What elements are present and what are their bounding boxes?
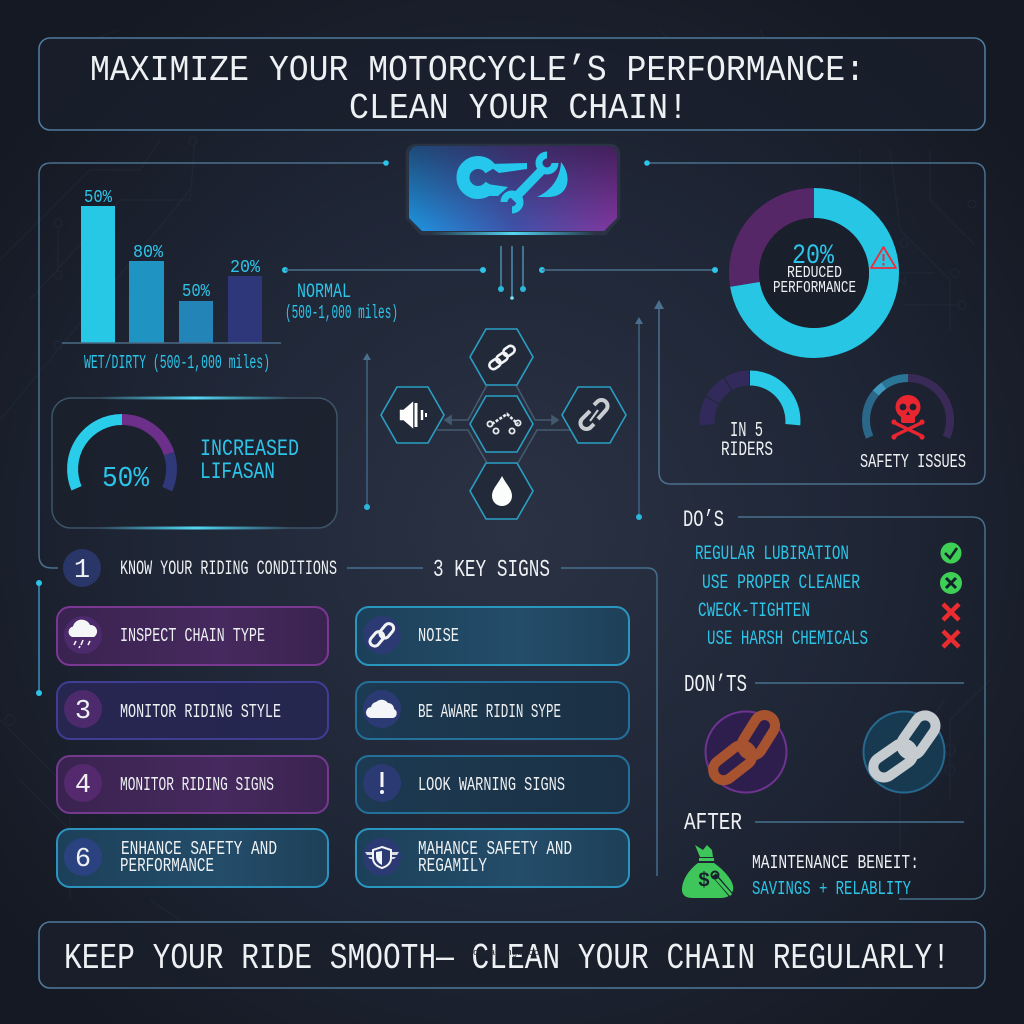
icon: clean chain bbox=[864, 711, 944, 792]
normal range label: (500-1,000 miles) bbox=[285, 302, 398, 324]
title text line 1: MAXIMIZE YOUR MOTORCYCLE’S PERFORMANCE: bbox=[90, 50, 865, 91]
donut label: PERFORMANCE bbox=[773, 279, 856, 298]
list: do's items: REGULAR LUBIRATION bbox=[695, 543, 849, 566]
icon: winged shield bbox=[365, 847, 399, 868]
icon: money bag: $ bbox=[698, 870, 710, 893]
icon: red cross 1 bbox=[943, 604, 959, 620]
icon: cloud bbox=[366, 700, 397, 718]
card: monitor riding style: MONITOR RIDING STYLE bbox=[120, 701, 281, 723]
icon: broken chain center bbox=[487, 414, 521, 434]
donut label bbox=[773, 264, 856, 298]
arrow: left vertical bbox=[363, 353, 371, 510]
lifespan card bbox=[52, 396, 337, 530]
icon: chain link top bbox=[488, 344, 516, 371]
card: inspect chain type bbox=[57, 607, 328, 665]
stat: in 5 riders: IN 5 bbox=[730, 420, 763, 443]
step 1 row: KNOW YOUR RIDING CONDITIONS bbox=[120, 558, 337, 581]
card: warning signs: LOOK WARNING SIGNS bbox=[418, 774, 565, 796]
logo panel bbox=[407, 145, 619, 235]
lifespan label: INCREASED bbox=[200, 436, 299, 462]
card: monitor riding signs: MONITOR RIDING SIGNS bbox=[120, 774, 274, 796]
card: warning signs bbox=[356, 756, 629, 813]
card: mahance safety: MAHANCE SAFETY AND bbox=[418, 838, 572, 860]
title text line 2: CLEAN YOUR CHAIN! bbox=[349, 88, 688, 129]
icon: warning triangle bbox=[871, 247, 896, 268]
panel: do's and don'ts bbox=[682, 507, 985, 900]
bar chart: 50% bbox=[84, 188, 112, 208]
stat: safety issues: SAFETY ISSUES bbox=[860, 451, 966, 473]
step 1 row: 1 bbox=[74, 556, 90, 586]
arrow: right vertical bbox=[635, 317, 643, 520]
benefit text bbox=[752, 852, 919, 900]
icon: exclamation bbox=[380, 772, 384, 794]
bar chart: 20% bbox=[230, 258, 260, 278]
list: do's items bbox=[695, 543, 868, 651]
donut chart bbox=[744, 203, 896, 343]
lifespan label bbox=[200, 436, 299, 485]
footer panel bbox=[39, 922, 985, 988]
benefit text: MAINTENANCE BENEIT: bbox=[752, 852, 919, 874]
card: mahance safety bbox=[356, 829, 629, 887]
card: enhance safety and performance: PERFORMANCE bbox=[120, 855, 214, 877]
frame: right connector bbox=[644, 160, 985, 484]
footer small overlaid text: cleaningbroom bbox=[473, 948, 545, 958]
donut label: REDUCED bbox=[787, 264, 842, 283]
stat: safety issues bbox=[860, 378, 966, 473]
normal range label bbox=[282, 267, 486, 324]
frame: left connector bbox=[36, 160, 389, 696]
icon: broken link right bbox=[580, 400, 608, 429]
list: do's items: USE PROPER CLEANER bbox=[702, 572, 860, 595]
card: enhance safety and performance: 6 bbox=[75, 845, 91, 875]
icon: chain link bbox=[368, 622, 396, 648]
card: monitor riding style: 3 bbox=[75, 697, 91, 727]
bar chart: 50% bbox=[182, 282, 210, 302]
hexagon connectors bbox=[437, 385, 570, 463]
connector lines under logo bbox=[498, 246, 526, 300]
benefit text: SAVINGS + RELABLITY bbox=[752, 878, 911, 900]
card: monitor riding signs bbox=[57, 756, 328, 813]
heading: 3 key signs: 3 KEY SIGNS bbox=[433, 557, 550, 584]
normal range label: NORMAL bbox=[297, 281, 351, 304]
icon: red cross 2 bbox=[943, 631, 959, 647]
donut value: 20% bbox=[792, 241, 834, 272]
card: enhance safety and performance bbox=[57, 829, 328, 887]
icon: rusty chain bbox=[706, 711, 786, 792]
heading: 3 key signs bbox=[347, 557, 657, 876]
card: noise: NOISE bbox=[418, 625, 459, 647]
icon: oil drop bbox=[492, 476, 512, 506]
card: be aware: BE AWARE RIDIN SYPE bbox=[418, 701, 561, 723]
bar chart: 80% bbox=[133, 243, 163, 263]
list: do's items: CWECK-TIGHTEN bbox=[698, 600, 810, 623]
stat: in 5 riders: RIDERS bbox=[721, 439, 773, 462]
card: inspect chain type: INSPECT CHAIN TYPE bbox=[120, 625, 265, 647]
icon: money bag bbox=[682, 845, 733, 898]
icon: sound waves bbox=[401, 403, 426, 427]
icon: chain and wrench bbox=[463, 155, 568, 210]
card: enhance safety and performance: ENHANCE SAFETY AND bbox=[121, 838, 277, 860]
heading: after: AFTER bbox=[684, 810, 742, 837]
lifespan label: LIFASAN bbox=[200, 459, 275, 485]
icon: skull and crossbones bbox=[891, 395, 925, 440]
card: monitor riding signs: 4 bbox=[75, 771, 91, 801]
lifespan gauge bbox=[73, 420, 171, 489]
heading: do's: DO’S bbox=[683, 507, 724, 533]
bar chart bbox=[62, 188, 281, 374]
list: do's items: USE HARSH CHEMICALS bbox=[707, 628, 868, 651]
card: monitor riding style bbox=[57, 682, 328, 739]
bar chart: WET/DIRTY (500-1,000 miles) bbox=[84, 352, 270, 374]
stat: in 5 riders bbox=[707, 378, 793, 462]
hexagon diagram bbox=[381, 329, 626, 519]
icon: rain cloud bbox=[69, 620, 97, 648]
right link to donut bbox=[539, 267, 718, 273]
hexagon outlines bbox=[381, 329, 626, 519]
title panel bbox=[39, 38, 985, 130]
step 1 row bbox=[63, 549, 337, 587]
icon: green check bbox=[940, 542, 962, 564]
lifespan value: 50% bbox=[102, 462, 150, 495]
card: mahance safety: REGAMILY bbox=[418, 855, 487, 877]
card: be aware bbox=[356, 682, 629, 739]
icon: green cross bbox=[940, 572, 962, 594]
card: noise bbox=[356, 607, 629, 665]
heading: don'ts: DON’TS bbox=[684, 672, 747, 699]
